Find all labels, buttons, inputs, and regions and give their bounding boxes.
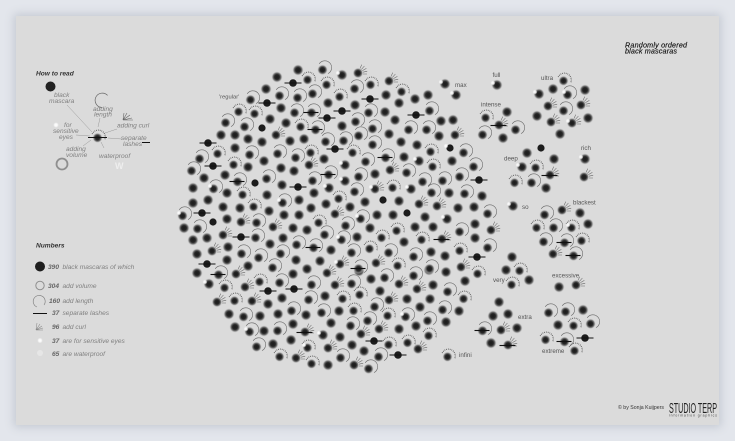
icon: adding length arc: [95, 93, 108, 108]
label: regular: 'regular': [219, 94, 239, 100]
title: Randomly ordered: [625, 40, 688, 50]
icon: sensitive eyes white dot: [53, 122, 59, 128]
label: for sensitive eyes: for: [64, 122, 72, 129]
heading: how to read: How to read: [36, 70, 75, 78]
logo: studio terp: information graphics: [669, 414, 717, 418]
label: for sensitive eyes: [53, 122, 79, 141]
row: 160 add length: 160: [49, 298, 60, 305]
label: black mascara: mascara: [49, 98, 75, 105]
label: adding length: length: [94, 112, 112, 118]
icon: curl rays: [123, 113, 133, 120]
label: adding volume: adding: [66, 146, 86, 153]
row: 37 separate lashes: [33, 310, 110, 317]
group: deep: deep: [504, 156, 518, 162]
row: 304 add volume: add volume: [62, 283, 97, 290]
group: extra: extra: [518, 314, 532, 321]
panel: numbers legend: [33, 242, 135, 358]
label: adding volume: volume: [66, 152, 88, 159]
row: 37 separate lashes: 37: [52, 310, 60, 317]
group: full: full: [492, 72, 500, 79]
chart: regular mascaras cluster: [177, 61, 500, 374]
label: for sensitive eyes: sensitive: [53, 128, 79, 135]
group: blackest: [531, 200, 596, 261]
label: adding curl: adding curl: [117, 122, 150, 130]
group: excessive: excessive: [552, 272, 580, 280]
row: 37 sensitive eyes: 37: [52, 338, 60, 345]
group: intense: [477, 102, 525, 144]
group: extreme: extreme: [542, 348, 565, 355]
group: very: [493, 251, 535, 290]
row: 160 add length: [33, 295, 94, 307]
group: rich: [579, 145, 593, 182]
group: extra: [474, 296, 532, 350]
group: so: so: [522, 204, 529, 211]
row: 390 black mascaras: 390: [48, 264, 59, 271]
row: 65 waterproof: are waterproof: [62, 351, 106, 358]
row: 37 sensitive eyes: are for sensitive eyes: [62, 338, 126, 345]
row: 96 add curl: [36, 323, 86, 331]
panel: how to read legend: [36, 70, 150, 171]
icon: separate lashes line: [142, 142, 150, 144]
row: 304 add volume: 304: [48, 283, 59, 290]
row: 37 separate lashes: separate lashes: [62, 310, 110, 317]
group: intense: intense: [481, 102, 502, 108]
icon: volume ring: [56, 158, 68, 170]
label: adding length: adding: [93, 106, 113, 113]
label: black mascara: black: [54, 92, 70, 99]
icon: black mascara dot: [46, 82, 56, 92]
group: blackest: blackest: [573, 200, 596, 206]
group: excessive: [552, 272, 585, 293]
row: 304 add volume: [36, 281, 97, 290]
group: ultra: ultra: [541, 75, 554, 82]
label: black mascara: [49, 92, 75, 105]
icon: full glyph example: [88, 130, 107, 143]
credit: author: © by Sonja Kuijpers: [618, 404, 664, 411]
row: 96 add curl: 96: [52, 324, 60, 331]
row: 390 black mascaras: black mascaras of which: [62, 264, 135, 271]
group: full: [491, 72, 503, 91]
group: infini: infini: [459, 352, 472, 359]
title: black mascaras: [625, 46, 677, 56]
label: waterproof: waterproof: [99, 153, 131, 160]
row: 96 add curl: add curl: [62, 324, 86, 331]
group: max: max: [455, 82, 468, 89]
group: infini: [442, 349, 472, 362]
label: adding length: [93, 106, 113, 118]
label: separate lashes: [121, 135, 147, 148]
label: adding volume: [66, 146, 88, 159]
group: extreme: [540, 303, 600, 356]
heading: numbers: Numbers: [36, 242, 65, 250]
label: separate lashes: lashes: [123, 141, 143, 148]
group: ultra: [531, 73, 594, 140]
row: 65 waterproof: 65: [52, 351, 60, 358]
legend leader lines: [67, 105, 122, 148]
group: very: very: [493, 277, 506, 284]
label: for sensitive eyes: eyes: [59, 134, 74, 141]
row: 65 waterproof: [37, 350, 106, 358]
group: so: [507, 200, 529, 212]
group: rich: rich: [581, 145, 592, 152]
group: deep: [504, 144, 560, 194]
group: max: [439, 78, 468, 101]
row: 390 black mascaras: [35, 262, 135, 272]
row: 160 add length: add length: [62, 298, 94, 305]
label: separate lashes: separate: [121, 135, 147, 142]
icon: waterproof W: W: [115, 161, 124, 171]
row: 37 sensitive eyes: [37, 338, 126, 345]
title: [625, 40, 688, 56]
